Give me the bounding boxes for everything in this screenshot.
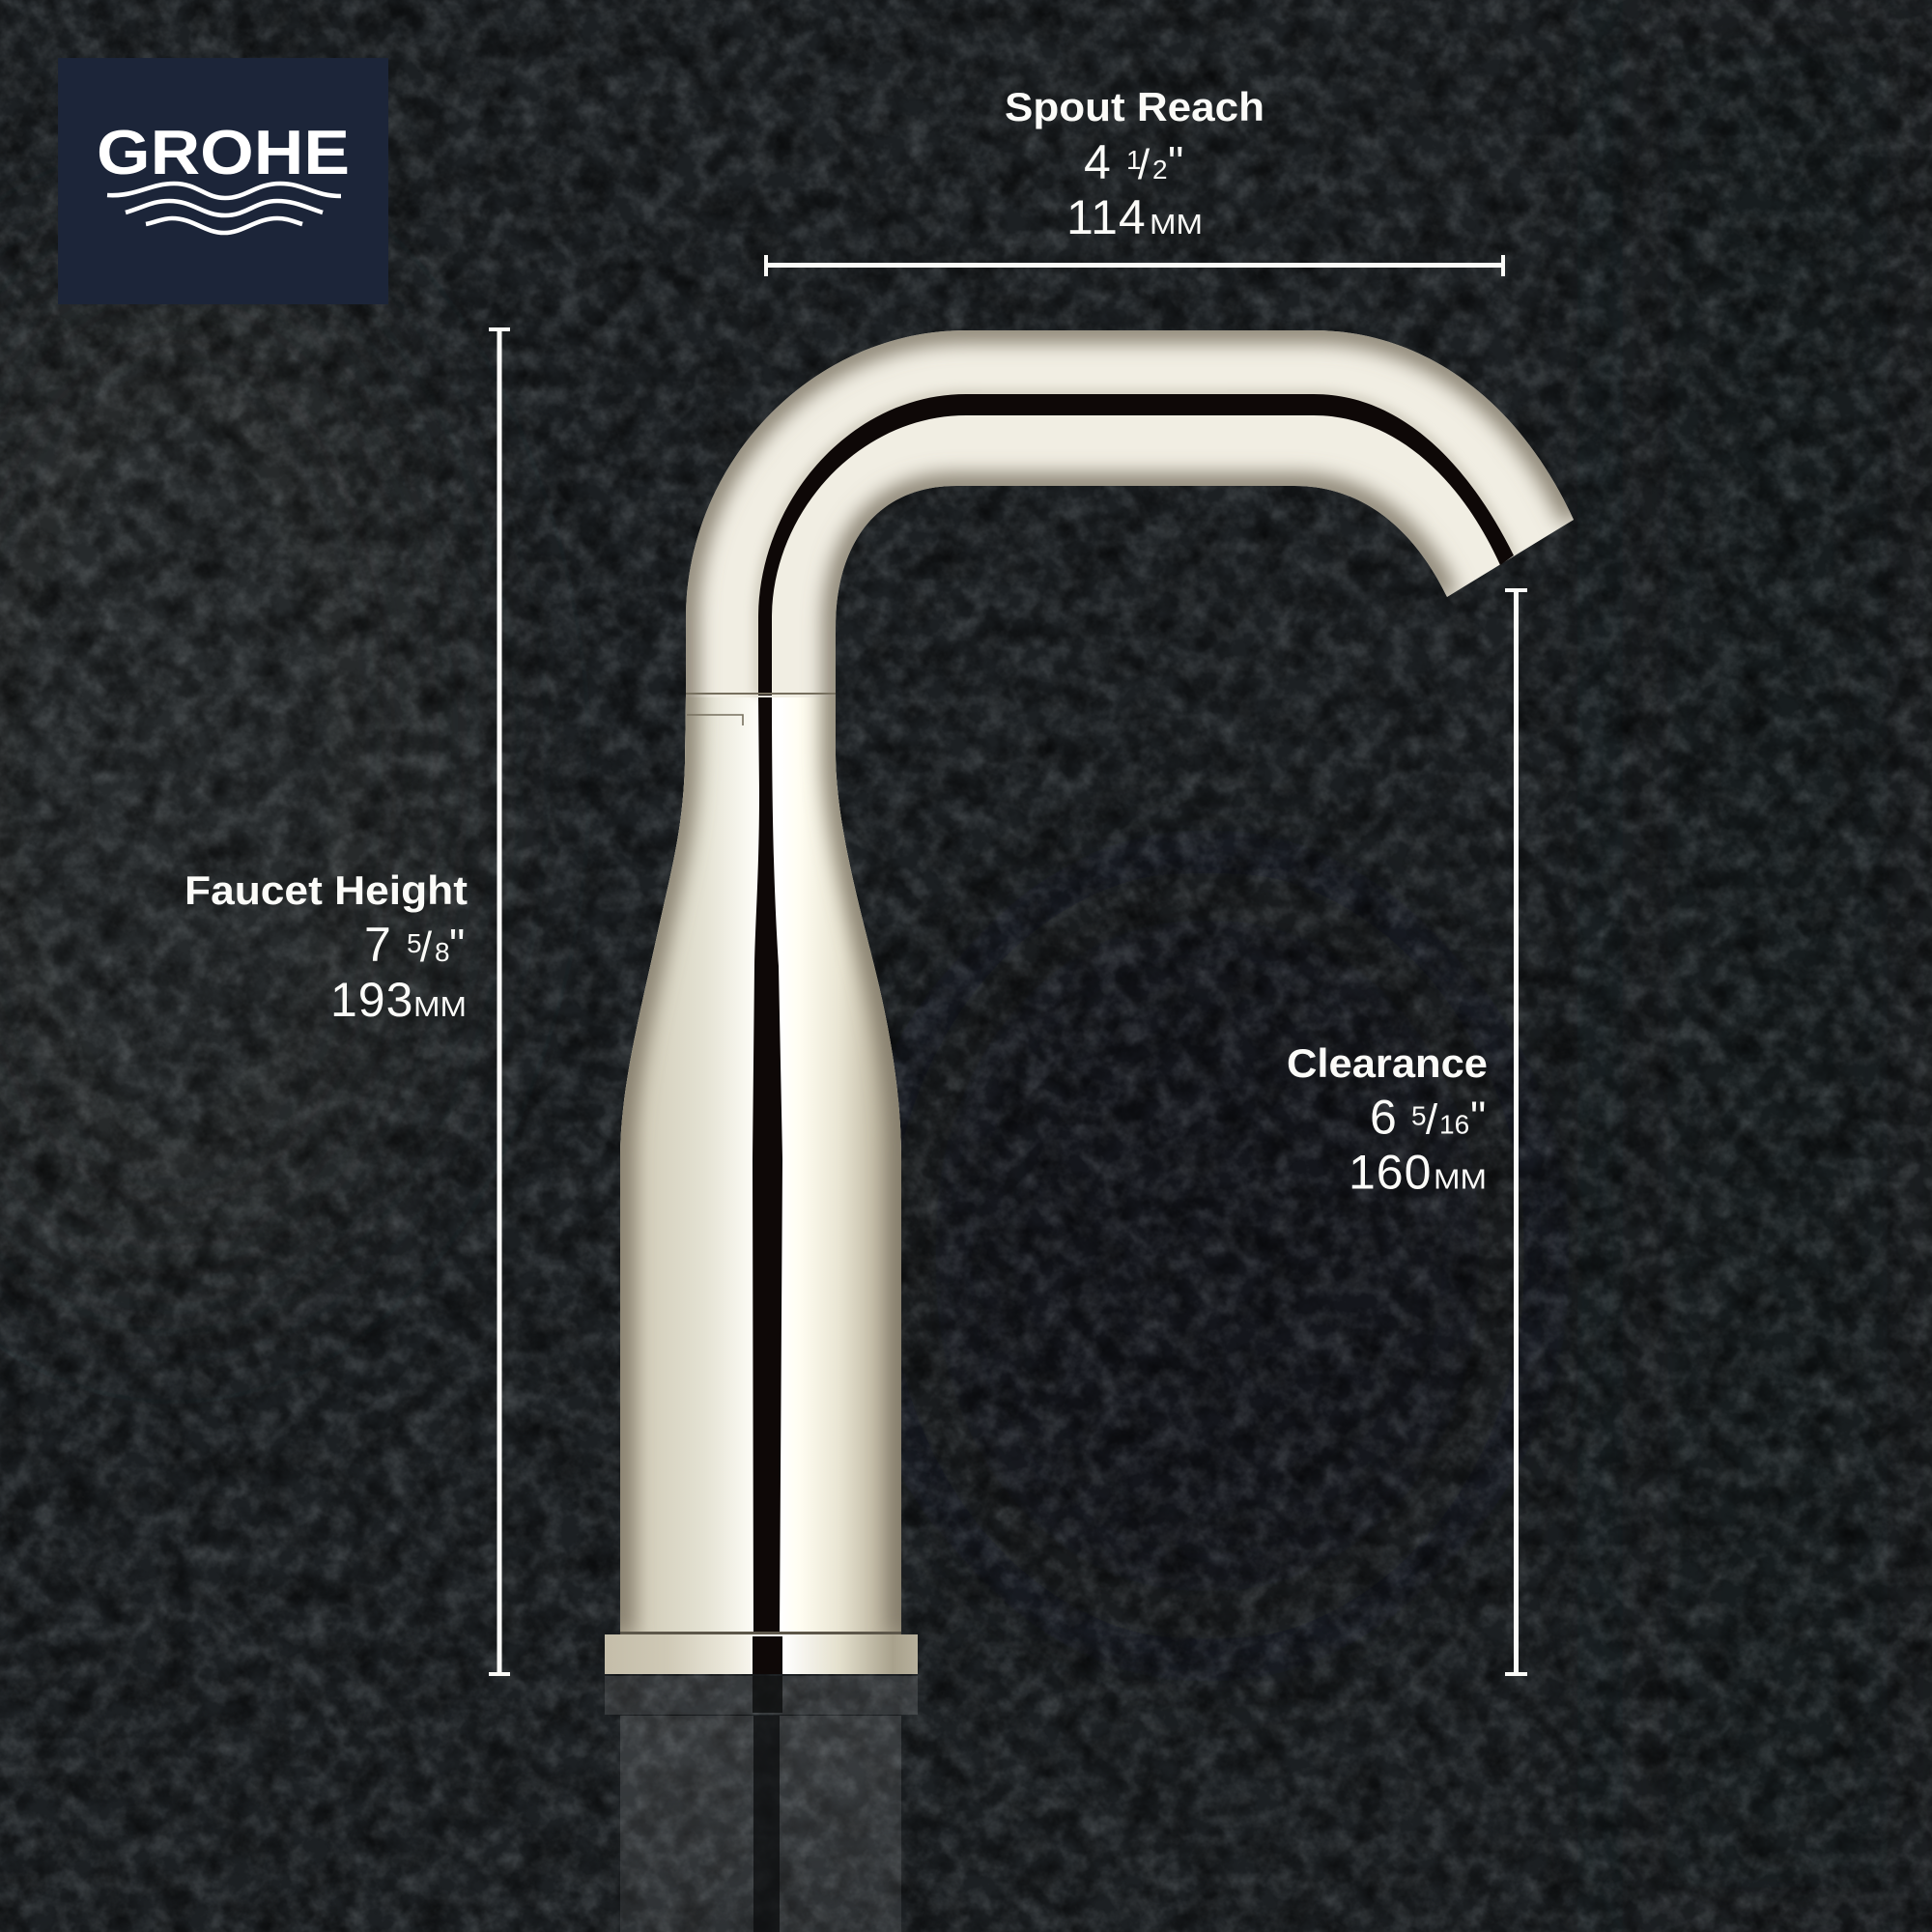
dimension line: clearance [1505,588,1527,1676]
faucet: dark reflection stripe on body [753,697,782,1633]
label: spout reach: 114 [1066,190,1147,244]
label: faucet height: 5 [407,928,422,958]
label: faucet height: MM [413,992,467,1023]
label: faucet height: " [449,920,465,970]
label: spout reach: 4 [1084,135,1112,189]
logo wordmark: GROHE [97,117,350,187]
dimension line: faucet height [489,327,510,1676]
logo waves [107,184,341,233]
label: clearance: 5 [1411,1101,1427,1130]
label: clearance: " [1470,1092,1486,1142]
logo: GROHE [58,58,388,304]
label: spout reach: " [1168,137,1183,187]
faucet: collar seam and handle detail [686,694,836,725]
label: spout reach: MM [1150,210,1203,241]
label: clearance: / [1426,1095,1438,1144]
faucet: polished nickel spout and body [599,309,1594,1674]
label: faucet height: 193 [330,973,413,1027]
label: faucet height: 8 [435,937,450,967]
dimension line: spout reach [764,255,1505,276]
label: spout reach: 1 [1126,145,1142,175]
label: spout reach: 2 [1152,155,1168,185]
label: faucet height: 7 [364,918,392,972]
label: spout reach: Spout Reach [1005,84,1264,129]
label: spout reach [1005,84,1264,244]
label: spout reach: / [1138,141,1151,188]
label: faucet height [185,867,468,1027]
faucet: base flange [605,1632,918,1674]
label: clearance [1287,1040,1488,1200]
faucet reflection on surface [605,1676,918,1932]
label: clearance: 6 [1370,1090,1398,1144]
label: clearance: 16 [1439,1109,1469,1140]
label: faucet height: / [420,923,433,971]
label: clearance: 160 [1349,1146,1432,1200]
label: faucet height: Faucet Height [185,867,468,913]
label: clearance: MM [1434,1165,1487,1196]
faucet: dark reflection stripe on spout [758,394,1514,696]
label: clearance: Clearance [1287,1040,1488,1086]
